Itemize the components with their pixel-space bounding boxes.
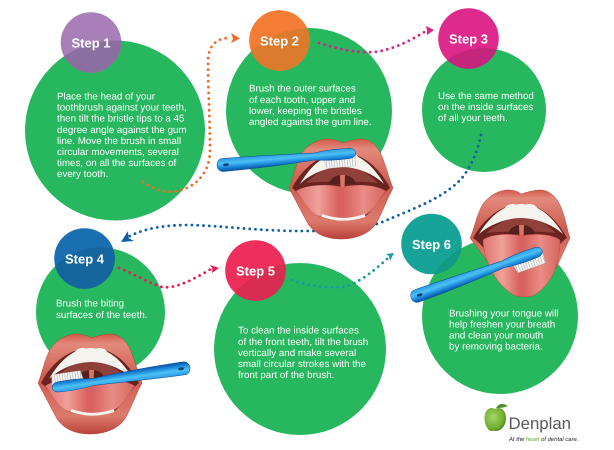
step 5 text: vertically and make several [238,348,356,359]
step 6 badge: Step 6 [412,237,451,252]
panel: step 6 [401,214,578,394]
upper teeth [49,348,133,379]
step 1 badge [61,12,121,73]
icon: apple [484,404,508,431]
step 3 text [438,91,534,124]
brand name: Denplan [508,414,571,433]
step 3 text: on the inside surfaces [438,102,533,113]
icon: toothbrush step 6 [409,245,546,310]
panel: step 2 [226,10,392,194]
step 1 text: every tooth. [57,169,108,180]
step 1 text: toothbrush against your teeth, [57,103,187,114]
step 2 text: of each tooth, upper and [249,95,355,106]
step 5 text: of the front teeth, tilt the brush [238,337,368,348]
step 6 text: help freshen your breath [449,319,555,330]
step 5 badge [225,240,286,301]
step 1 text: Place the head of your [57,92,156,102]
step 1 text: circular movements, several [57,147,179,158]
step 6 text [449,308,558,353]
step 5 text: front part of the brush. [238,370,334,381]
tagline: At the heart of dental care. [508,436,578,443]
step 1 text: then tilt the bristle tips to a 45 [57,114,185,125]
panel: step 1 [25,12,205,221]
step 4 badge [54,228,115,289]
step 1 text [57,92,187,180]
step 6 text: and clean your mouth [449,330,543,342]
step 2 text: Brush the outer surfaces [249,84,356,95]
arrow: step 1 to step 2 [143,33,240,192]
arrow: step 2 to step 3 [319,26,434,52]
step 2 text: lower, keeping the bristles [249,106,362,117]
step 3 badge [438,8,499,69]
illustration: mouth step 2 [289,139,393,239]
step 1 text: line. Move the brush in small [57,136,181,147]
step 2 text [249,84,372,128]
step 2 text: angled against the gum line. [249,117,372,128]
illustration: mouth step 4 [38,334,142,434]
step 6 text: Brushing your tongue will [449,308,558,319]
step 6 text: by removing bacteria. [449,342,543,353]
step 3 badge: Step 3 [449,32,488,46]
panel: step 5 [214,240,386,435]
step 6 badge [401,214,462,274]
step 1 text: times, on all the surfaces of [57,158,177,169]
arrow: step 3 to step 4 [121,135,481,242]
step 3 text: Use the same method [438,91,534,102]
step 4 text [56,299,148,321]
step 2 badge [249,10,310,71]
logo: Denplan [484,404,578,443]
upper teeth [300,153,384,184]
step 4 text: surfaces of the teeth. [56,310,148,321]
illustration: mouth step 6 [470,190,570,297]
upper teeth [479,204,563,234]
step 5 text: To clean the inside surfaces [238,326,359,337]
icon: toothbrush step 2 [216,147,357,178]
step 2 badge: Step 2 [260,34,299,48]
step 1 text: degree angle against the gum [57,125,187,136]
step 4 badge: Step 4 [65,252,105,266]
step 1 badge: Step 1 [71,36,111,50]
icon: toothbrush step 4 [50,355,191,394]
step 5 text: small circular strokes with the [238,359,366,370]
panel: step 3 [422,8,546,172]
arrow: step 4 to step 5 [119,265,219,287]
step 3 text: of all your teeth. [438,113,508,124]
step 5 badge: Step 5 [236,264,275,278]
arrow: step 5 to step 6 [292,253,394,287]
step 5 text [238,326,368,381]
panel: step 4 [36,228,165,376]
step 4 text: Brush the biting [56,299,124,310]
